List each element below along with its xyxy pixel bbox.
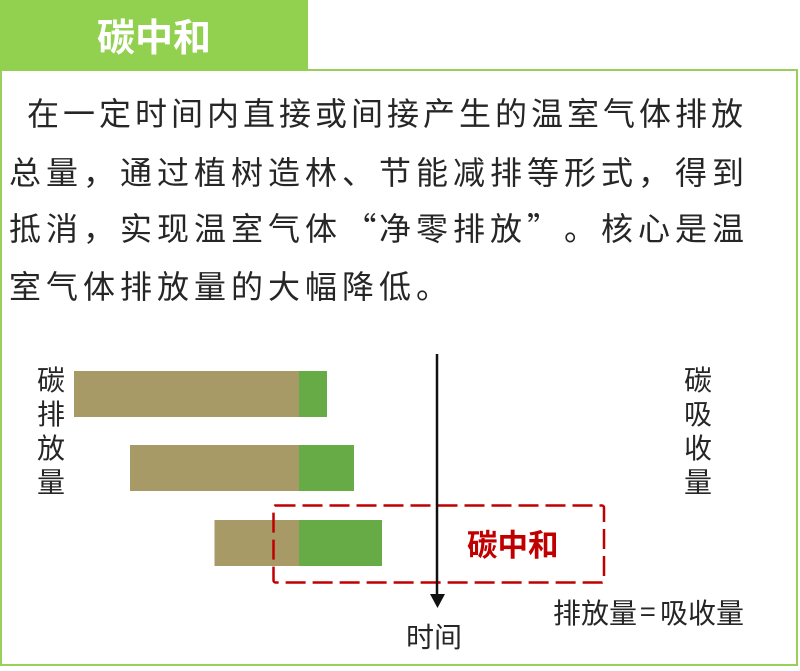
bar: second period [130,445,354,491]
callout label: carbon neutral: 碳中和 [467,521,558,565]
label: carbon emissions: 放 [37,427,65,467]
label: time: 时间 [406,616,462,656]
label: carbon absorption: 碳 [684,359,712,399]
bar: first period [74,371,327,417]
text block: definition: ” [527,204,559,250]
label: carbon absorption: 收 [684,427,712,467]
text block: definition: 室气体排放量的大幅降低。 [9,262,453,308]
label: emissions equal absorption: 吸收量 [660,592,744,632]
title: 碳中和 [97,7,211,62]
text block: definition: “ [344,204,377,250]
text block: definition: 在一定时间内直接或间接产生的温室气体排放 [27,89,747,135]
label: emissions equal absorption: = [640,591,656,631]
label: emissions equal absorption: 排放量 [553,592,637,632]
title tab [0,0,308,71]
bar: third period [214,520,382,566]
label: carbon emissions: 碳 [37,359,65,399]
text block: definition [9,89,749,308]
label: carbon emissions: 量 [37,461,65,501]
chart: carbon neutrality diagram [37,354,744,656]
text block: definition: 总量，通过植树造林、节能减排等形式，得到 [9,148,749,194]
text block: definition: 抵消，实现温室气体 净零排放 。核心是温 [9,204,749,250]
label: carbon emissions: 排 [37,393,65,433]
callout box: carbon neutral [274,506,604,582]
label: carbon absorption: 吸 [684,393,712,433]
arrow: time axis [430,354,445,608]
label: carbon absorption: 量 [684,461,712,501]
